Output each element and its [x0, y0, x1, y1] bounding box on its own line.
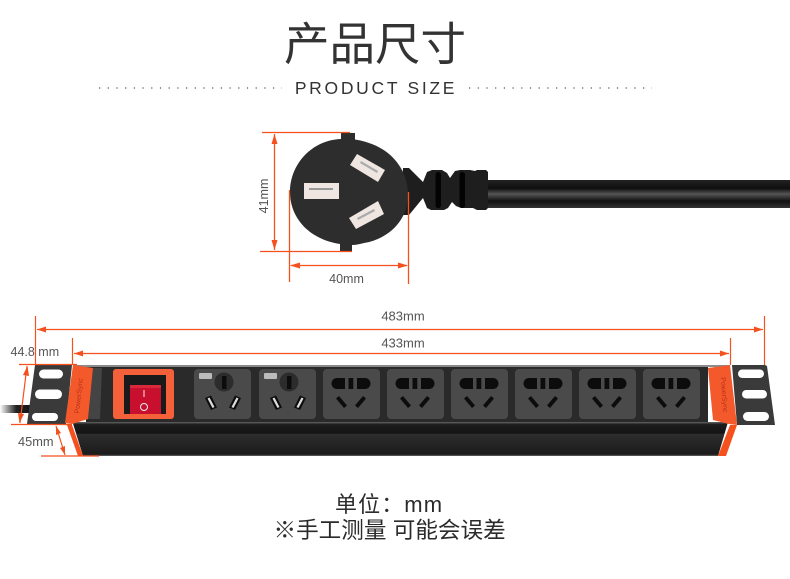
plug photo [290, 133, 790, 251]
plug height dimension: 41mm [257, 132, 352, 252]
strip cable [0, 405, 36, 413]
depth dimension: 45mm [18, 426, 99, 456]
subtitle dotted rule left [99, 87, 282, 89]
plug strain relief [401, 168, 488, 215]
left bracket [27, 365, 72, 424]
right orange end cap [708, 365, 737, 425]
depth dimension: 45mm: 45mm [18, 434, 54, 449]
strip front extrusion [72, 422, 728, 456]
width dimension: 483mm: 483mm [381, 308, 425, 324]
grounded sockets [194, 369, 251, 419]
standard sockets [323, 369, 380, 419]
title: 产品尺寸 [284, 8, 466, 74]
power strip: PowerSync [719, 377, 728, 413]
power strip [0, 365, 775, 456]
plug body [290, 133, 408, 251]
unit note: 单位：mm [335, 492, 443, 517]
left orange end cap [65, 365, 93, 424]
subtitle dotted rule right [469, 87, 652, 89]
plug width dimension: 40mm: 40mm [329, 272, 364, 286]
height dimension: 44.8 mm: 44.8 mm [10, 345, 59, 359]
plug pins [304, 183, 339, 199]
width dimension: 433mm [72, 336, 730, 365]
power cable [486, 180, 790, 208]
measurement disclaimer: ※手工测量 可能会误差 [274, 518, 506, 543]
plug width dimension: 40mm [290, 190, 408, 286]
left dark post [88, 368, 102, 419]
rocker switch [113, 369, 174, 419]
plug height dimension: 41mm: 41mm [257, 179, 271, 213]
strip top face [86, 366, 708, 423]
width dimension: 433mm: 433mm [381, 336, 425, 350]
width dimension: 483mm [36, 308, 764, 365]
right bracket [732, 365, 775, 425]
subtitle: PRODUCT SIZE: PRODUCT SIZE [295, 78, 457, 98]
height dimension: 44.8 mm [10, 345, 77, 424]
power strip: PowerSync [74, 377, 85, 414]
